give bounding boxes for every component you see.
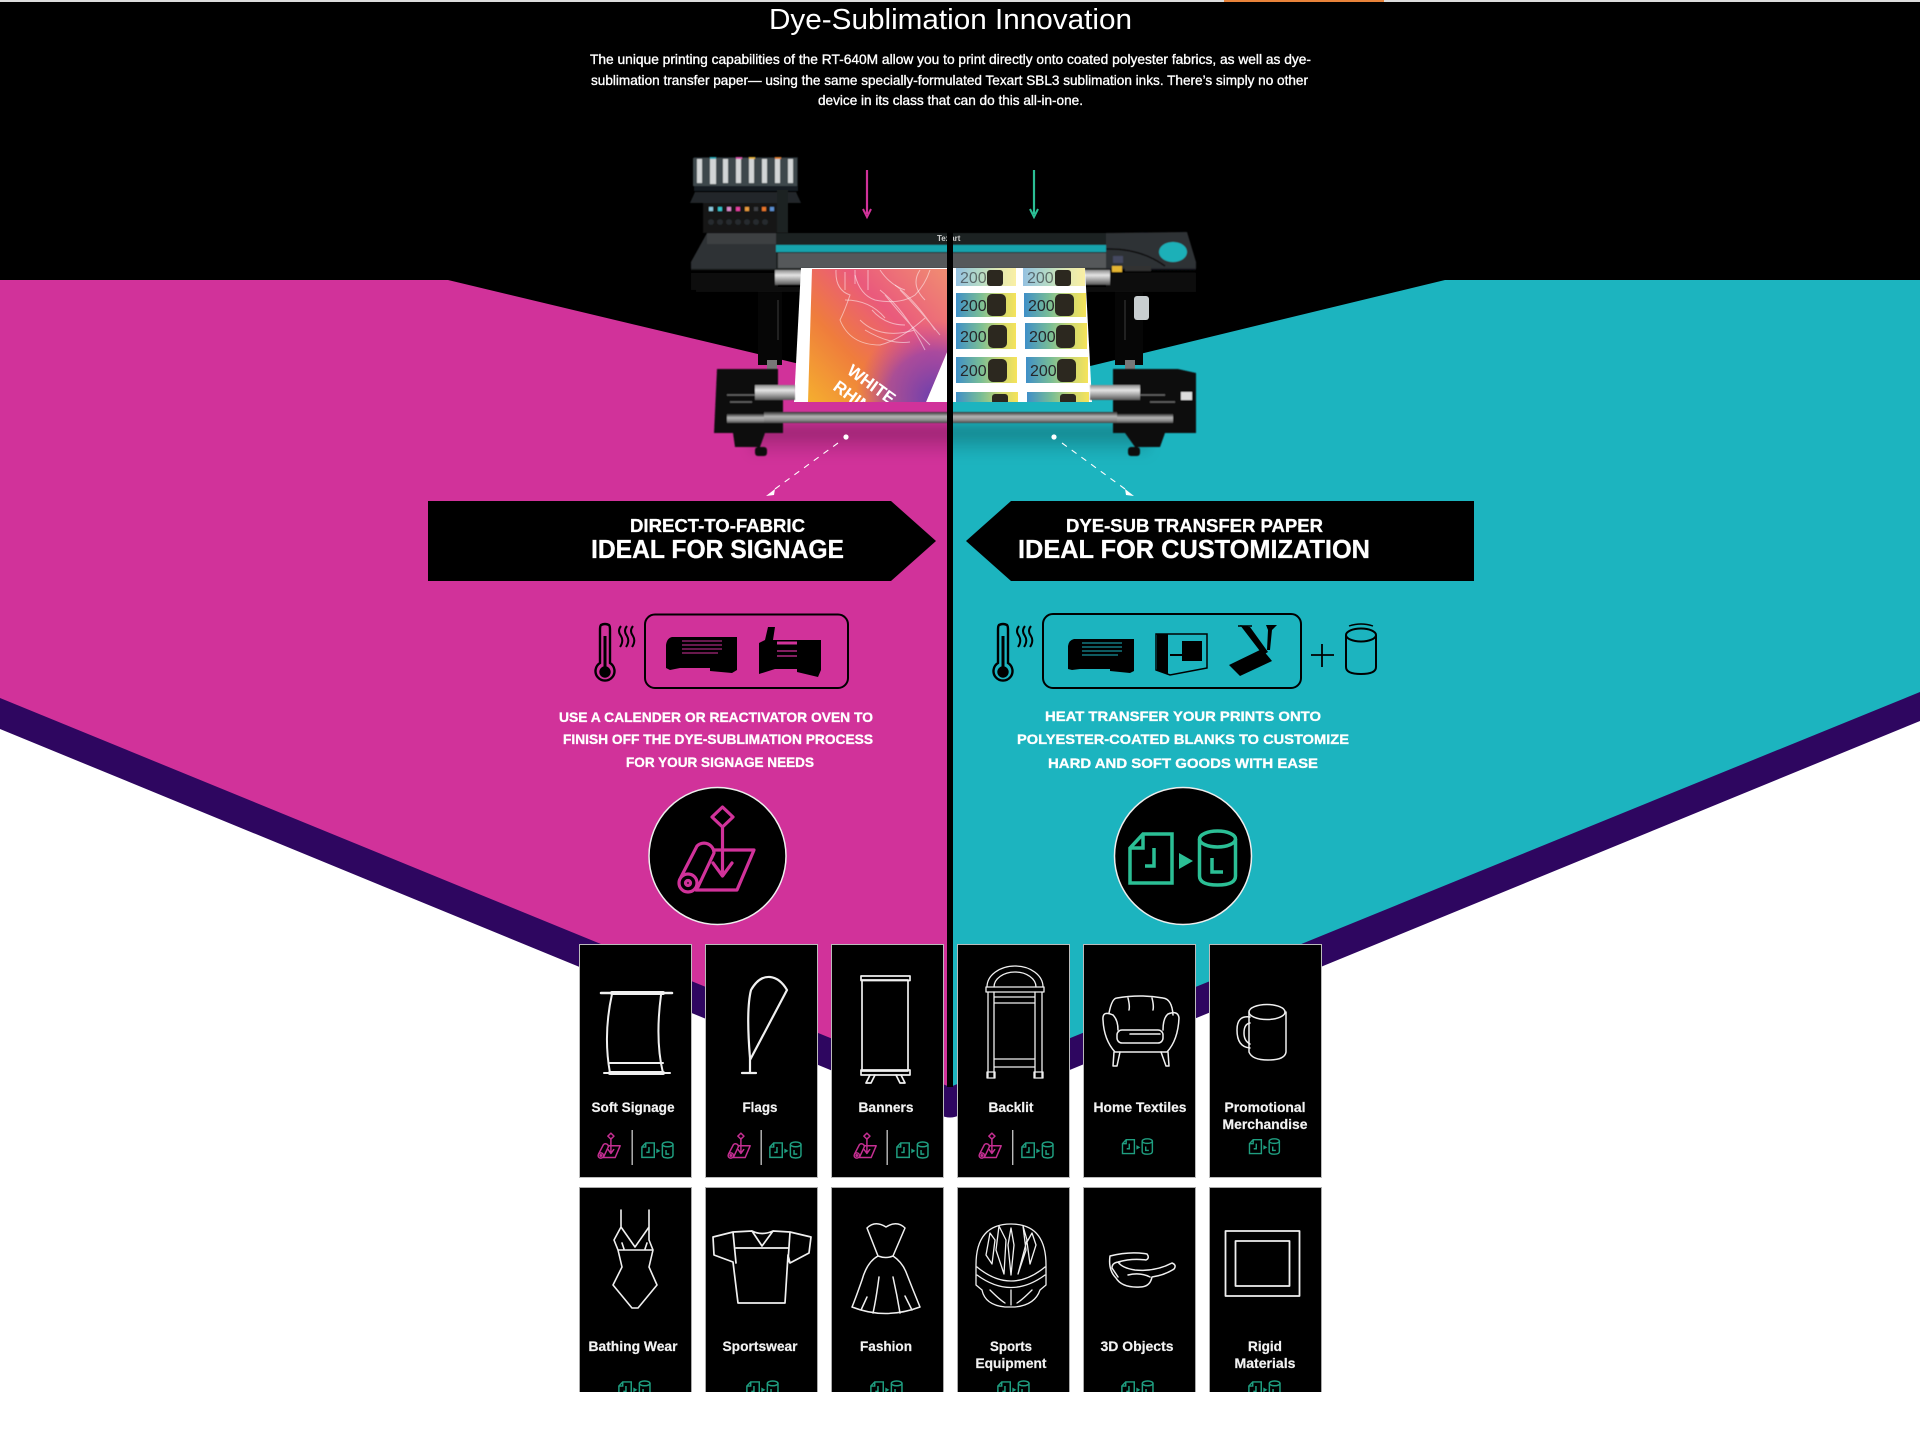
fabric print sheet: RHINO bbox=[830, 377, 885, 424]
text: heat transfer instructions bbox=[1017, 708, 1349, 771]
text: calender instructions: USE A CALENDER OR REACTIVATOR OVEN TO bbox=[559, 709, 873, 725]
card: Soft Signage: Soft Signage bbox=[592, 1099, 675, 1115]
badge: transfer paper icon bbox=[1114, 788, 1252, 924]
icon: backlit frame bbox=[986, 966, 1044, 1078]
card: Rigid Materials bbox=[1210, 1188, 1322, 1398]
transfer paper sheet with labels: 200 bbox=[960, 298, 987, 315]
arrow: magenta down to fabric side bbox=[863, 170, 871, 217]
card: Fashion bbox=[832, 1188, 944, 1398]
availability icon bbox=[1121, 1380, 1154, 1392]
card: Backlit: Backlit bbox=[988, 1099, 1034, 1115]
intro text block: sublimation transfer paper— using the same specially-formulated Texart SBL3 sublimation inks. There’s simply no other bbox=[591, 72, 1308, 88]
icon: transfer oven bbox=[1156, 634, 1207, 675]
card: Sports Equipment: Sports bbox=[990, 1338, 1032, 1354]
purple divider tip bbox=[946, 1087, 957, 1116]
printer brand: Texart bbox=[937, 234, 961, 243]
availability icons bbox=[854, 1130, 928, 1165]
card: Flags: Flags bbox=[742, 1099, 778, 1115]
card: 3D Objects bbox=[1084, 1188, 1196, 1398]
icon: soft signage bbox=[601, 993, 672, 1073]
top black band bbox=[0, 2, 1920, 422]
transfer paper sheet with labels: 200 bbox=[1028, 298, 1055, 315]
card: Promotional Merchandise bbox=[1210, 944, 1322, 1178]
card: Banners bbox=[832, 944, 944, 1178]
text: calender instructions: FINISH OFF THE DYE-SUBLIMATION PROCESS bbox=[563, 731, 873, 747]
availability icon bbox=[870, 1380, 903, 1392]
title: Dye-Sublimation Innovation bbox=[769, 4, 1132, 36]
icon: thermometer with heat, transfer side bbox=[994, 624, 1032, 681]
row 2 cards bbox=[580, 1188, 1322, 1398]
center divider bbox=[947, 232, 953, 1087]
card: Bathing Wear bbox=[580, 1188, 692, 1398]
icon: calender bbox=[1068, 639, 1134, 673]
icon: dress bbox=[852, 1224, 920, 1314]
center divider over printer bbox=[947, 232, 953, 472]
ink rack bbox=[690, 157, 801, 233]
availability icon bbox=[746, 1380, 779, 1392]
printer main body bbox=[691, 232, 1196, 292]
text: heat transfer instructions: POLYESTER-COATED BLANKS TO CUSTOMIZE bbox=[1017, 731, 1349, 747]
icon: sunglasses bbox=[1110, 1253, 1175, 1287]
banner: dye-sub transfer paper: IDEAL FOR CUSTOMIZATION bbox=[1018, 536, 1370, 564]
icon: reactivator oven bbox=[759, 627, 821, 677]
banner: dye-sub transfer paper bbox=[966, 501, 1474, 581]
text: calender instructions bbox=[559, 709, 873, 770]
card: Fashion: Fashion bbox=[860, 1338, 912, 1354]
banner: direct-to-fabric: DIRECT-TO-FABRIC bbox=[630, 515, 805, 536]
fabric print sheet: WHITE bbox=[844, 361, 899, 408]
availability icons bbox=[728, 1130, 801, 1165]
transfer paper sheet with labels: 200 bbox=[1030, 363, 1057, 380]
callout line: fabric media to banner bbox=[766, 434, 849, 496]
card: Rigid Materials: Rigid bbox=[1248, 1338, 1282, 1354]
availability icon bbox=[1249, 1139, 1279, 1154]
availability icon bbox=[1122, 1139, 1152, 1154]
availability icons bbox=[979, 1130, 1053, 1165]
transfer paper sheet with labels: 200 bbox=[1027, 270, 1054, 287]
text: calender instructions: FOR YOUR SIGNAGE NEEDS bbox=[626, 754, 814, 770]
card: 3D Objects: 3D Objects bbox=[1100, 1338, 1174, 1354]
callout line: transfer paper to banner bbox=[1051, 434, 1134, 496]
icon: bike helmet bbox=[976, 1224, 1046, 1307]
purple chevron shadow bbox=[0, 684, 1920, 1118]
card: Sports Equipment: Equipment bbox=[976, 1355, 1047, 1371]
availability icon bbox=[1248, 1380, 1281, 1392]
banner: direct-to-fabric: IDEAL FOR SIGNAGE bbox=[591, 536, 844, 564]
availability icon bbox=[618, 1380, 651, 1392]
equipment box: calender, oven and heat press bbox=[1043, 614, 1301, 688]
intro text block bbox=[590, 51, 1311, 108]
transfer paper sheet with labels: 200 bbox=[960, 363, 987, 380]
card: Home Textiles bbox=[1084, 944, 1196, 1178]
icon: armchair bbox=[1103, 996, 1179, 1066]
printer floor shadow bbox=[750, 425, 1150, 458]
card: Rigid Materials: Materials bbox=[1234, 1355, 1296, 1371]
badge: direct-to-fabric icon bbox=[649, 788, 786, 924]
icon: roll-up banner bbox=[861, 976, 910, 1083]
card: Promotional Merchandise: Promotional bbox=[1224, 1099, 1306, 1115]
card: Banners: Banners bbox=[858, 1099, 914, 1115]
icon: thermometer with heat, fabric side bbox=[596, 624, 634, 681]
icon: heat press bbox=[1229, 625, 1277, 676]
transfer paper sheet with labels: 200 bbox=[1029, 329, 1056, 346]
icon: swimsuit bbox=[613, 1210, 657, 1308]
icon: rigid panel bbox=[1226, 1231, 1300, 1296]
panel: magenta direct-to-fabric background bbox=[0, 280, 950, 1087]
icon: mug bbox=[1237, 1004, 1286, 1060]
icon: flag bbox=[742, 977, 787, 1073]
card: Sportswear bbox=[706, 1188, 818, 1398]
card: Promotional Merchandise: Merchandise bbox=[1222, 1116, 1308, 1132]
card: Bathing Wear: Bathing Wear bbox=[588, 1338, 678, 1354]
transfer paper sheet with labels: 200 bbox=[960, 270, 987, 287]
card: Sportswear: Sportswear bbox=[722, 1338, 798, 1354]
icon: plus and cylinder blank bbox=[1311, 624, 1376, 674]
arrow: green down to paper side bbox=[1030, 170, 1038, 217]
intro text block: The unique printing capabilities of the RT-640M allow you to print directly onto coated polyester fabrics, as well as dye- bbox=[590, 51, 1311, 67]
card: Soft Signage bbox=[580, 944, 692, 1178]
printer illustration bbox=[690, 157, 1196, 458]
availability icons bbox=[598, 1130, 673, 1165]
fabric print sheet bbox=[794, 268, 947, 402]
card: Sports Equipment bbox=[958, 1188, 1070, 1398]
icon: calender bbox=[666, 637, 737, 673]
availability icon bbox=[997, 1380, 1030, 1392]
take-up rollers and side units bbox=[714, 369, 1196, 456]
panel: teal transfer paper background bbox=[950, 280, 1920, 1087]
transfer paper sheet with labels bbox=[953, 258, 1092, 404]
text: heat transfer instructions: HEAT TRANSFER YOUR PRINTS ONTO bbox=[1045, 708, 1321, 724]
icon: jersey bbox=[713, 1231, 811, 1303]
ink waste bottle bbox=[1134, 296, 1149, 320]
banner: direct-to-fabric bbox=[428, 501, 936, 581]
printer stands bbox=[758, 287, 1143, 372]
card: Home Textiles: Home Textiles bbox=[1094, 1099, 1187, 1115]
text: heat transfer instructions: HARD AND SOFT GOODS WITH EASE bbox=[1048, 755, 1318, 771]
card: Flags bbox=[706, 944, 818, 1178]
browser top strip bbox=[0, 0, 1920, 2]
intro text block: device in its class that can do this all-in-one. bbox=[818, 92, 1083, 108]
transfer paper sheet with labels: 200 bbox=[960, 329, 987, 346]
equipment box: calender and reactivator oven bbox=[645, 614, 848, 688]
card: Backlit bbox=[958, 944, 1070, 1178]
banner: dye-sub transfer paper: DYE-SUB TRANSFER PAPER bbox=[1066, 515, 1323, 536]
